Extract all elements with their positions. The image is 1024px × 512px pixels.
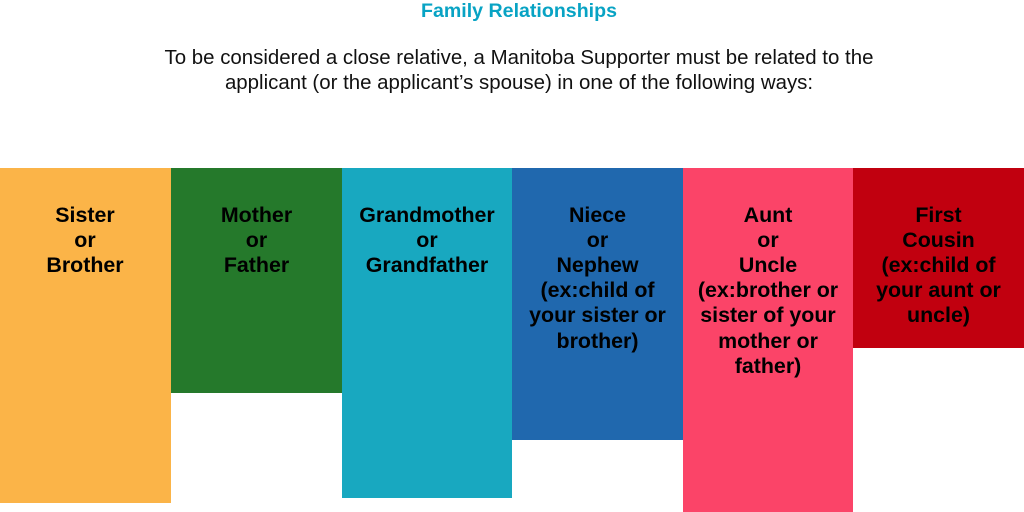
panel: aunt or uncle: Aunt: [744, 202, 792, 226]
panel: niece or nephew: Nephew: [556, 253, 638, 277]
panel: aunt or uncle: [683, 168, 853, 512]
panel: sister or brother: [0, 168, 171, 503]
intro text: applicant (or the applicant’s spouse) in one of the following ways:: [225, 71, 813, 94]
panel: niece or nephew: Niece: [569, 202, 626, 226]
panel: niece or nephew: (ex:child of: [540, 278, 655, 302]
panel: aunt or uncle: Uncle: [739, 253, 797, 277]
panel: mother or father: [171, 168, 342, 393]
intro text: [164, 46, 873, 94]
panel: niece or nephew: your sister or: [529, 303, 666, 327]
panel: niece or nephew: brother): [556, 329, 638, 353]
panel: sister or brother: Brother: [46, 253, 124, 277]
panel: first cousin: First: [915, 202, 962, 226]
panel: grandmother or grandfather: [342, 168, 512, 498]
panel: first cousin: [853, 168, 1024, 348]
panel: mother or father: Mother: [221, 202, 292, 226]
panel: mother or father: Father: [224, 253, 289, 277]
panel: aunt or uncle: sister of your: [700, 303, 836, 327]
panel: aunt or uncle: or: [757, 228, 779, 252]
panel: mother or father: or: [246, 228, 267, 252]
panel: first cousin: (ex:child of: [881, 253, 996, 277]
panel: grandmother or grandfather: or: [416, 228, 438, 252]
panel: aunt or uncle: mother or: [718, 329, 818, 353]
panel: grandmother or grandfather: Grandmother: [359, 202, 495, 226]
panel: grandmother or grandfather: Grandfather: [366, 253, 488, 277]
panel: first cousin: uncle): [907, 303, 970, 327]
intro text: To be considered a close relative, a Manitoba Supporter must be related to the: [165, 46, 873, 69]
panel: niece or nephew: [512, 168, 683, 440]
panel: first cousin: Cousin: [902, 228, 975, 252]
panel: sister or brother: or: [74, 228, 96, 252]
panel: aunt or uncle: (ex:brother or: [698, 278, 838, 302]
panel: sister or brother: Sister: [55, 202, 115, 226]
title: Family Relationships: [421, 0, 617, 22]
panel: aunt or uncle: father): [735, 354, 801, 378]
panel: first cousin: your aunt or: [876, 278, 1001, 302]
panel: niece or nephew: or: [587, 228, 608, 252]
